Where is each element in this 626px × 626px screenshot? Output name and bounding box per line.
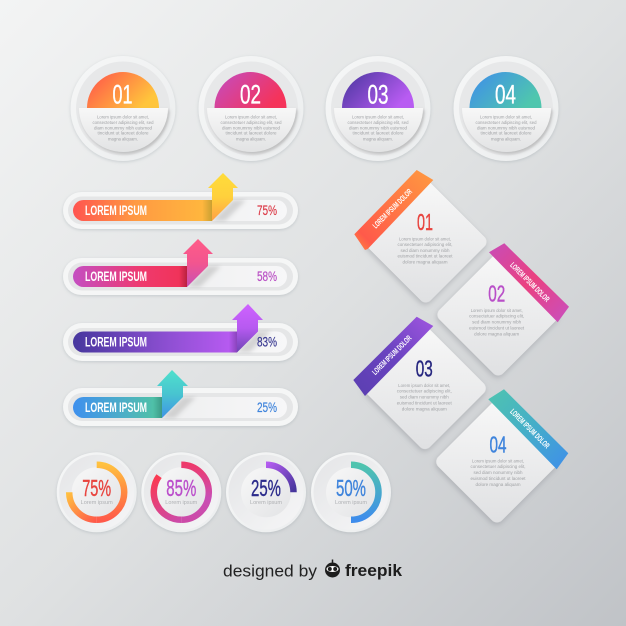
text block: tincidunt ut laoreet dolore bbox=[98, 131, 149, 136]
panel: diamond 01 bbox=[354, 170, 489, 305]
text block: consectetuer adipiscing elit, sed bbox=[348, 120, 409, 125]
panel: circle 03 bbox=[326, 56, 430, 161]
value: 75% bbox=[82, 475, 111, 501]
arrow bbox=[208, 173, 238, 221]
text block bbox=[469, 308, 525, 336]
ribbon bbox=[353, 317, 433, 396]
ring chart bbox=[266, 465, 294, 492]
text block: Lorem ipsum dolor sit amet, bbox=[398, 383, 450, 388]
value: 50% bbox=[336, 475, 366, 501]
panel: diamond 03 bbox=[353, 317, 489, 452]
text block: tincidunt ut laoreet dolore bbox=[352, 131, 404, 136]
panel: donut 50% bbox=[311, 452, 391, 532]
panel: donut 85% bbox=[141, 452, 221, 532]
text block: consectetuer adipiscing elit, sed bbox=[92, 120, 154, 125]
arrow bbox=[183, 239, 213, 287]
text block: euismod tincidunt ut laoreet bbox=[398, 254, 453, 259]
panel: progress bar 83% bbox=[63, 304, 298, 361]
text block bbox=[470, 458, 526, 487]
text block: sed diam nonummy nibh bbox=[400, 248, 450, 253]
icon: freepik logo bbox=[325, 560, 340, 578]
caption: Lorem ipsum bbox=[335, 500, 367, 506]
value: 85% bbox=[166, 475, 196, 501]
number 01: 01 bbox=[112, 80, 132, 110]
number: 04 bbox=[490, 432, 507, 458]
text block: Lorem ipsum dolor sit amet, bbox=[97, 114, 149, 120]
ring chart bbox=[69, 465, 124, 520]
text block: dolore magna aliquam bbox=[402, 260, 448, 264]
value: 25% bbox=[251, 475, 281, 501]
text block: Lorem ipsum dolor sit amet, bbox=[471, 308, 523, 313]
text block: diam nonummy nibh euismod bbox=[222, 125, 281, 130]
text block: Lorem ipsum dolor sit amet, bbox=[352, 114, 404, 120]
panel: diamond 04 bbox=[433, 389, 568, 525]
panel: donut 75% bbox=[57, 452, 137, 532]
text block bbox=[220, 114, 282, 141]
ribbon text: LOREM IPSUM DOLOR bbox=[371, 187, 414, 230]
text block: dolore magna aliquam bbox=[474, 331, 520, 336]
panel: progress bar 75% bbox=[63, 173, 298, 229]
text block: euismod tincidunt ut laoreet bbox=[469, 326, 525, 330]
panel: progress bar 58% bbox=[63, 239, 298, 295]
ribbon bbox=[488, 389, 568, 469]
ribbon bbox=[489, 243, 569, 322]
value: 83% bbox=[257, 334, 277, 350]
ring chart bbox=[154, 465, 209, 520]
panel: donut 25% bbox=[226, 452, 306, 532]
label: LOREM IPSUM bbox=[85, 269, 147, 284]
text block: diam nonummy nibh euismod bbox=[477, 125, 536, 130]
text block: consectetuer adipiscing elit, bbox=[469, 314, 524, 319]
text block: euismod tincidunt ut laoreet bbox=[470, 476, 526, 481]
panel: circle 02 bbox=[198, 56, 304, 161]
text block: dolore magna aliquam bbox=[476, 482, 521, 487]
text block bbox=[92, 114, 154, 141]
text block: tincidunt ut laoreet dolore bbox=[226, 131, 277, 136]
ribbon text: LOREM IPSUM DOLOR bbox=[370, 334, 414, 377]
arrow bbox=[232, 304, 263, 352]
text block: consectetuer adipiscing elit, bbox=[470, 464, 526, 469]
text block: sed diam nonummy nibh bbox=[400, 394, 449, 400]
footer credit bbox=[223, 560, 403, 580]
number: 03 bbox=[416, 356, 433, 382]
text block: tincidunt ut laoreet dolore bbox=[480, 131, 532, 136]
ribbon bbox=[354, 170, 433, 250]
number 02: 02 bbox=[240, 80, 261, 110]
footer credit: freepik bbox=[345, 561, 403, 580]
text block: magna aliquam. bbox=[236, 136, 266, 141]
text block: Lorem ipsum dolor sit amet, bbox=[472, 458, 524, 464]
text block: dolore magna aliquam bbox=[402, 406, 447, 411]
panel: diamond 02 bbox=[435, 243, 569, 378]
text block: Lorem ipsum dolor sit amet, bbox=[480, 114, 532, 120]
arrow bbox=[157, 370, 188, 418]
ribbon text: LOREM IPSUM DOLOR bbox=[508, 407, 551, 450]
text block: Lorem ipsum dolor sit amet, bbox=[399, 236, 451, 242]
text block: consectetuer adipiscing elit, bbox=[397, 389, 452, 394]
text block: consectetuer adipiscing elit, sed bbox=[220, 120, 282, 125]
caption: Lorem ipsum bbox=[250, 500, 282, 506]
text block: consectetuer adipiscing elit, bbox=[398, 242, 452, 247]
text block: magna aliquam. bbox=[491, 136, 521, 141]
text block: Lorem ipsum dolor sit amet, bbox=[225, 114, 277, 120]
text block: diam nonummy nibh euismod bbox=[94, 125, 153, 130]
ribbon text: LOREM IPSUM DOLOR bbox=[508, 261, 551, 304]
label: LOREM IPSUM bbox=[85, 334, 147, 350]
label: LOREM IPSUM bbox=[85, 203, 147, 218]
text block bbox=[398, 236, 453, 264]
caption: Lorem ipsum bbox=[81, 500, 113, 506]
text block: magna aliquam. bbox=[363, 136, 393, 141]
footer credit: designed by bbox=[223, 562, 318, 580]
panel: progress bar 25% bbox=[63, 370, 298, 426]
text block: sed diam nonummy nibh bbox=[474, 470, 523, 475]
text block: sed diam nonummy nibh bbox=[472, 320, 522, 324]
label: LOREM IPSUM bbox=[85, 400, 147, 415]
value: 58% bbox=[257, 269, 277, 284]
value: 25% bbox=[257, 400, 277, 415]
caption: Lorem ipsum bbox=[165, 500, 198, 506]
panel: circle 04 bbox=[454, 56, 558, 161]
text block bbox=[397, 383, 453, 411]
ring chart bbox=[351, 465, 378, 520]
text block: magna aliquam. bbox=[108, 136, 138, 141]
number 03: 03 bbox=[368, 80, 388, 110]
text block: euismod tincidunt ut laoreet bbox=[397, 400, 453, 405]
number: 02 bbox=[488, 280, 505, 306]
text block bbox=[348, 114, 409, 141]
text block: diam nonummy nibh euismod bbox=[349, 125, 408, 130]
panel: circle 01 bbox=[70, 56, 176, 161]
text block bbox=[476, 114, 537, 141]
value: 75% bbox=[257, 203, 277, 218]
text block: consectetuer adipiscing elit, sed bbox=[476, 120, 537, 125]
number: 01 bbox=[417, 209, 433, 235]
number 04: 04 bbox=[495, 80, 516, 110]
